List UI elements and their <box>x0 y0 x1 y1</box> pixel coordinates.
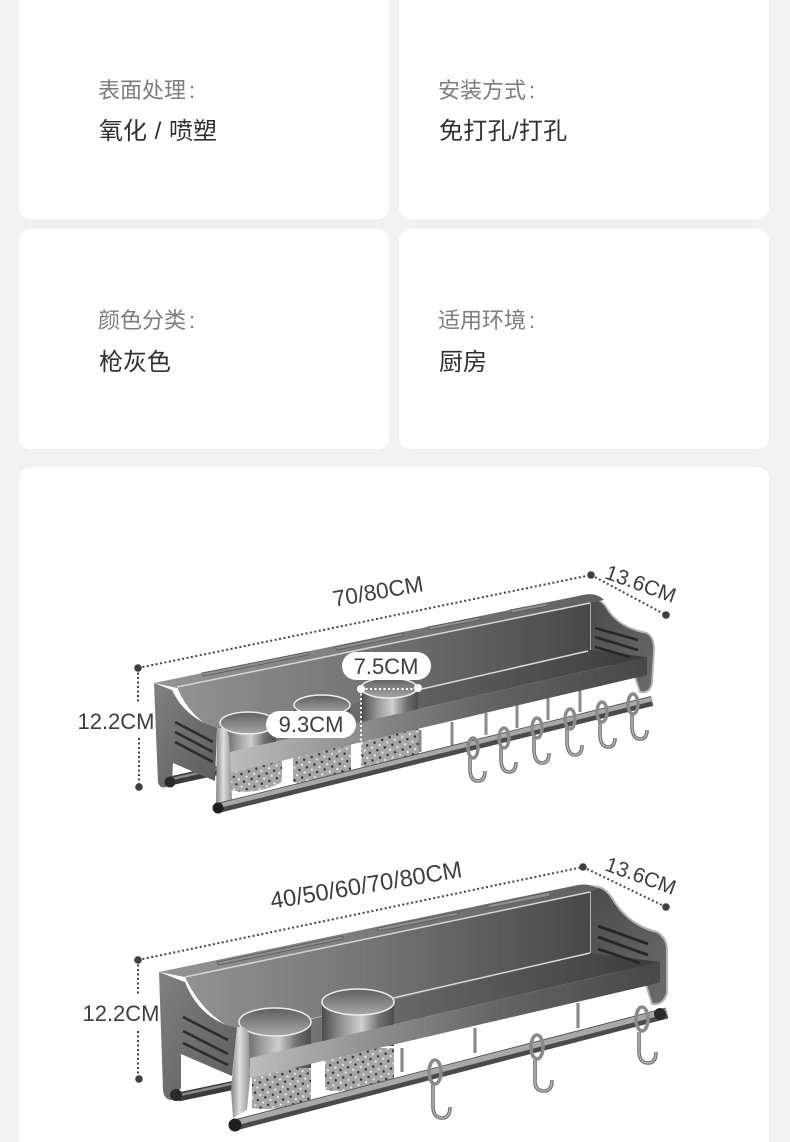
label: depth: 13.6CM <box>602 853 679 900</box>
diagram: rack 40–80 cm <box>82 853 679 1132</box>
left side slots <box>175 722 213 762</box>
rim slots <box>217 892 550 965</box>
label: length: 40/50/60/70/80CM <box>268 857 464 915</box>
floor highlight <box>422 651 588 689</box>
cups <box>220 678 418 760</box>
panel: installation method <box>399 0 769 219</box>
towel bar <box>164 699 652 814</box>
floor highlight <box>393 953 590 998</box>
rack floor <box>222 650 647 752</box>
dimension end dots <box>134 863 670 1083</box>
label: surface treatment: 表面处理: <box>98 78 195 103</box>
right side panel <box>590 886 667 1004</box>
callout: cup height: 9.3CM <box>279 712 343 737</box>
panel: dimensions <box>19 467 769 1142</box>
callout: cup height <box>266 689 361 762</box>
dimension lines <box>138 867 666 1079</box>
dimension end dots <box>134 571 670 791</box>
diagram: rack 70/80 cm <box>77 561 679 814</box>
front post <box>231 1027 250 1118</box>
label: installation method: 安装方式: <box>438 78 535 103</box>
left side panel <box>154 683 217 788</box>
cups <box>239 989 394 1068</box>
front rail <box>250 962 660 1078</box>
label: colour: 颜色分类: <box>98 308 195 333</box>
back hooks <box>402 1003 578 1072</box>
label: length: 70/80CM <box>331 571 425 612</box>
back hooks <box>420 690 580 752</box>
value: colour: 枪灰色 <box>99 349 171 376</box>
rim slots <box>202 603 547 676</box>
front hooks <box>468 694 647 781</box>
front rail <box>230 657 647 773</box>
right side slots <box>598 926 648 963</box>
towel bar <box>170 1008 667 1132</box>
back wall and top rim <box>154 594 604 735</box>
left side panel <box>159 972 237 1100</box>
panel: applicable environment <box>399 229 769 449</box>
label: height: 12.2CM <box>77 709 155 734</box>
panel: surface treatment <box>19 0 389 219</box>
value: installation method: 免打孔/打孔 <box>439 118 567 145</box>
front post <box>216 728 232 806</box>
rack floor <box>240 953 660 1058</box>
front hooks <box>429 1007 656 1118</box>
baskets under cups <box>230 725 419 792</box>
rear towel bar <box>170 768 220 781</box>
rear towel bar <box>178 1082 240 1097</box>
callout: cup diameter: 7.5CM <box>354 654 418 679</box>
right side panel <box>590 599 654 692</box>
value: applicable environment: 厨房 <box>439 349 487 376</box>
callout: cup diameter <box>342 652 431 693</box>
baskets under cups <box>252 1048 394 1109</box>
value: surface treatment: 氧化 / 喷塑 <box>99 118 217 145</box>
label: height: 12.2CM <box>82 1001 160 1026</box>
panel: colour <box>19 229 389 449</box>
dimension lines <box>138 575 666 787</box>
back wall and top rim <box>159 884 598 1034</box>
right side slots <box>595 628 638 657</box>
label: applicable environment: 适用环境: <box>438 308 535 333</box>
label: depth: 13.6CM <box>602 561 679 608</box>
left side slots <box>183 1017 228 1065</box>
